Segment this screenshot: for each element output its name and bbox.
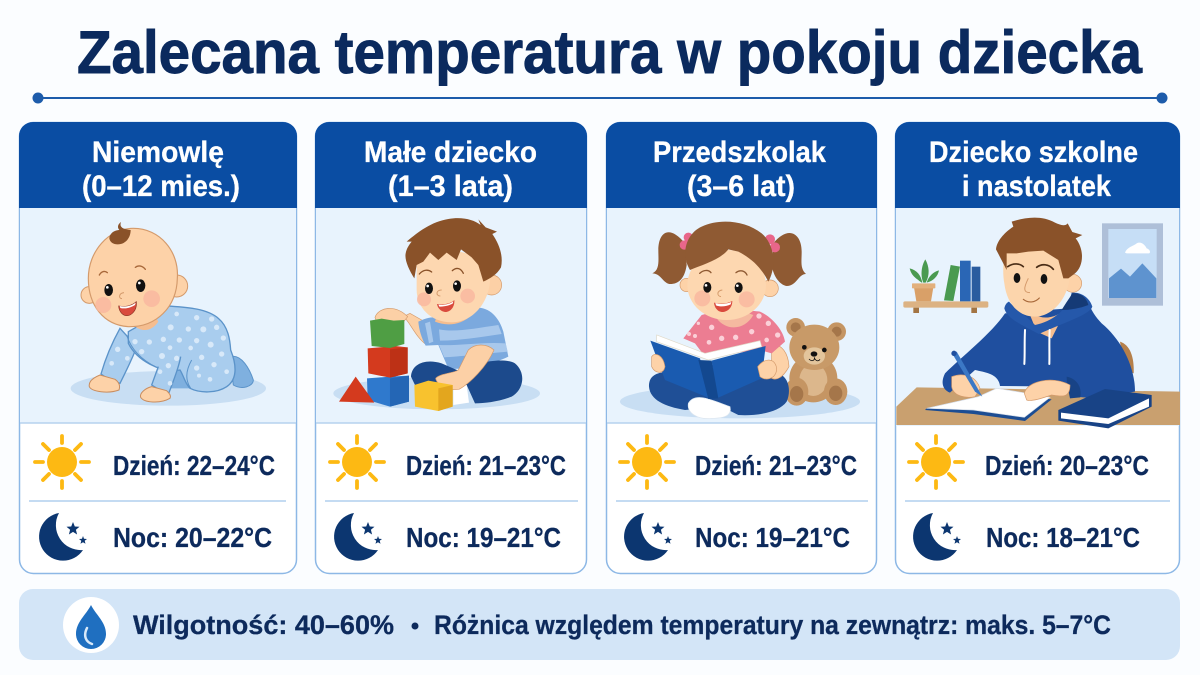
title: Zalecana temperatura w pokoju dziecka (77, 19, 1143, 86)
illustration: girl reading with teddy (620, 222, 860, 419)
heading: przedszkolak: Przedszkolak (653, 136, 827, 169)
temperature difference text: Różnica względem temperatury na zewnątrz: maks. 5–7°C (434, 610, 1111, 640)
heading: dziecko szkolne (929, 136, 1138, 203)
panel: dziecko szkolne (895, 122, 1180, 574)
icon: moon (39, 513, 87, 561)
panel: małe dziecko (315, 122, 587, 574)
heading: małe dziecko: (1–3 lata) (388, 170, 513, 203)
panel: humidity bar (19, 589, 1180, 660)
heading: niemowlę: Niemowlę (92, 136, 224, 169)
icon: sun (35, 436, 89, 488)
icon: water drop (63, 597, 119, 653)
heading: przedszkolak (653, 136, 827, 203)
panel: przedszkolak (606, 122, 877, 574)
icon: sun (330, 436, 384, 488)
icon: moon (913, 513, 961, 561)
day temperature: Dzień: 21–23°C (406, 450, 566, 481)
illustration: toddler with blocks (333, 218, 540, 411)
night temperature: Noc: 20–22°C (113, 522, 272, 553)
heading: niemowlę (82, 136, 240, 203)
heading: dziecko szkolne: Dziecko szkolne (929, 136, 1138, 169)
heading: małe dziecko (364, 136, 537, 203)
heading: niemowlę: (0–12 mies.) (82, 170, 240, 203)
heading: małe dziecko: Małe dziecko (364, 136, 537, 169)
day temperature: Dzień: 22–24°C (113, 450, 275, 481)
night temperature: Noc: 18–21°C (986, 522, 1140, 553)
day temperature: Dzień: 20–23°C (985, 450, 1149, 481)
night temperature: Noc: 19–21°C (695, 522, 850, 553)
heading: dziecko szkolne: i nastolatek (962, 170, 1112, 203)
day temperature: Dzień: 21–23°C (695, 450, 857, 481)
night temperature: Noc: 19–21°C (406, 522, 561, 553)
icon: sun (909, 436, 963, 488)
bullet (412, 622, 418, 630)
title rule (32, 92, 1168, 104)
humidity text: Wilgotność: 40–60% (133, 610, 394, 640)
illustration: teen studying (896, 218, 1180, 428)
panel: niemowlę (19, 122, 297, 574)
heading: przedszkolak: (3–6 lat) (687, 170, 795, 203)
icon: sun (620, 436, 674, 488)
icon: moon (334, 513, 382, 561)
icon: moon (624, 513, 672, 561)
illustration: crawling baby (71, 222, 266, 406)
